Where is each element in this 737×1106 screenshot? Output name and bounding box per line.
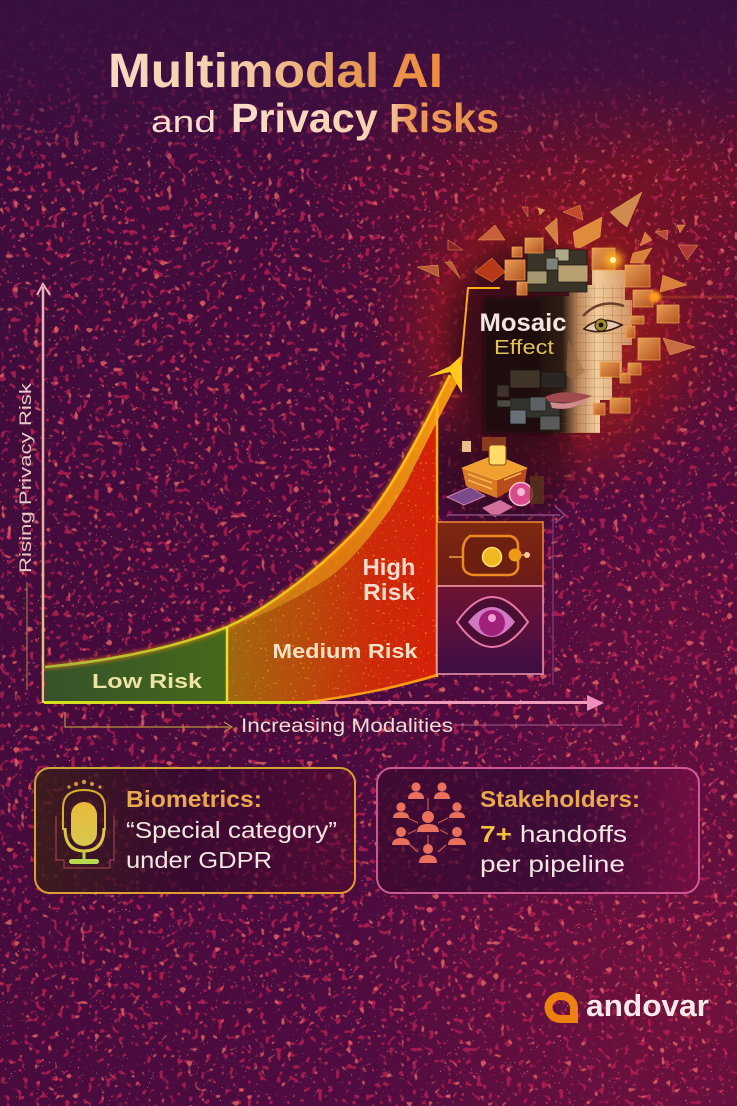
curve glow xyxy=(45,375,450,667)
text: stakeholders xyxy=(480,786,640,877)
thin line to mosaic xyxy=(461,288,500,365)
logo: andovar: andovar xyxy=(586,988,709,1023)
y axis xyxy=(27,284,50,703)
mosaic effect label xyxy=(480,309,567,359)
text: stakeholders: Stakeholders: xyxy=(480,786,640,812)
title xyxy=(108,45,499,141)
y axis label: Rising Privacy Risk xyxy=(16,382,35,573)
panel: stakeholders xyxy=(377,768,699,893)
x axis label: Increasing Modalities xyxy=(241,716,453,737)
icon: microphone xyxy=(56,780,114,868)
high risk label xyxy=(362,554,416,605)
low risk label: Low Risk xyxy=(92,671,203,693)
lens flares xyxy=(604,251,730,303)
title: and xyxy=(151,104,216,139)
flying shards xyxy=(417,192,698,355)
mosaic effect label: Mosaic xyxy=(480,309,567,337)
title: Multimodal AI xyxy=(108,45,443,98)
dark mosaic tiles xyxy=(497,249,588,430)
area sparkle xyxy=(228,435,436,701)
mosaic face illustration xyxy=(417,192,730,433)
icon: stakeholder network xyxy=(392,782,466,863)
modality stack xyxy=(437,437,565,685)
divider low / medium xyxy=(226,627,228,703)
text: biometrics: Biometrics: xyxy=(126,786,262,812)
text: biometrics: “Special category” xyxy=(126,817,337,843)
text: biometrics: under GDPR xyxy=(126,847,272,873)
medium and high risk area xyxy=(227,410,437,703)
high risk label: High xyxy=(362,554,416,580)
lips xyxy=(545,392,592,409)
lower curve xyxy=(300,675,437,703)
secondary x arrow xyxy=(65,712,622,732)
orange floating tiles xyxy=(505,238,679,415)
divider right edge xyxy=(436,402,438,677)
eye and brow xyxy=(583,304,624,332)
text: biometrics xyxy=(126,786,337,873)
upper band xyxy=(227,375,460,627)
medium risk label: Medium Risk xyxy=(272,641,419,663)
rising curve xyxy=(45,375,450,667)
text: stakeholders: 7+ handoffs xyxy=(480,821,627,847)
text: stakeholders: per pipeline xyxy=(480,851,625,877)
arrowhead xyxy=(427,355,462,393)
title: Privacy Risks xyxy=(231,95,499,141)
panel: biometrics xyxy=(35,768,355,893)
x axis xyxy=(44,695,604,711)
skin tiles xyxy=(540,270,632,433)
risk curve chart xyxy=(16,284,622,737)
thin arrows around stack xyxy=(447,506,565,685)
stage: chip box xyxy=(437,522,543,586)
stage: fusion cube xyxy=(447,437,544,517)
high risk label: Risk xyxy=(363,579,415,605)
dark side of face xyxy=(484,298,554,433)
low risk area xyxy=(45,627,227,703)
mosaic effect label: Effect xyxy=(494,337,555,359)
stage: eye box xyxy=(437,586,543,674)
logo icon xyxy=(544,992,578,1023)
